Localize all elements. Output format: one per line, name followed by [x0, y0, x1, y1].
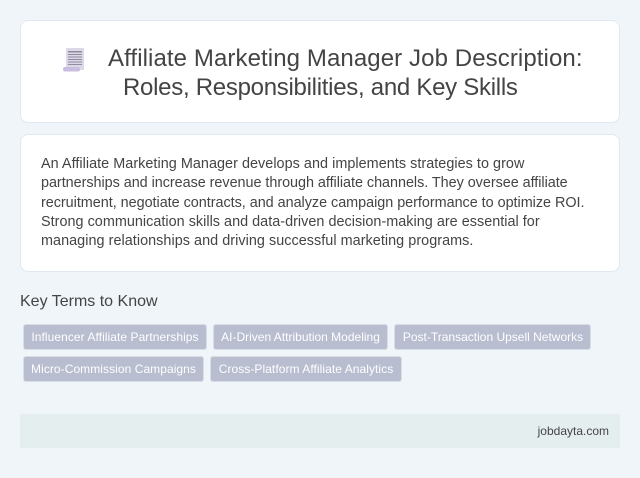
heading: key terms: Key Terms to Know [20, 293, 158, 310]
tag: Influencer Affiliate Partnerships [31, 330, 199, 344]
text block: description [41, 156, 584, 249]
tag [210, 356, 402, 382]
tag: AI-Driven Attribution Modeling [221, 330, 380, 344]
tag: Post-Transaction Upsell Networks [403, 330, 583, 344]
panel: description card [20, 134, 620, 272]
title: Roles, Responsibilities, and Key Skills [123, 74, 518, 101]
icon: document scroll [63, 48, 84, 72]
tag group: key terms [23, 324, 591, 382]
title [108, 45, 583, 101]
tag [23, 356, 204, 382]
footer source text: jobdayta.com [538, 424, 609, 438]
tag: Micro-Commission Campaigns [31, 362, 196, 376]
title: Affiliate Marketing Manager Job Description: [108, 45, 583, 72]
tag [213, 324, 388, 350]
tag [394, 324, 591, 350]
tag [23, 324, 207, 350]
panel: header card [20, 20, 620, 123]
text block: description: managing relationships and driving successful marketing programs. [41, 233, 473, 249]
text block: description: recruitment, negotiate contracts, and analyze campaign performance to optimize ROI. [41, 195, 584, 211]
text block: description: Strong communication skills and data-driven decision-making are essential for [41, 214, 540, 230]
text block: description: An Affiliate Marketing Manager develops and implements strategies to grow [41, 156, 524, 172]
text block: description: partnerships and increase revenue through affiliate channels. They oversee affiliate [41, 175, 568, 191]
footer bar [20, 414, 620, 448]
tag: Cross-Platform Affiliate Analytics [219, 362, 393, 376]
